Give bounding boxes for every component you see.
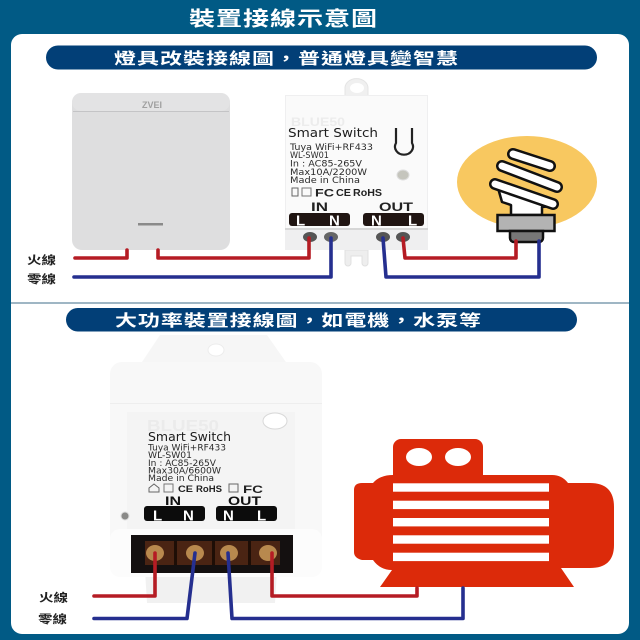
- icon: large smart switch module: Made in China: [148, 474, 214, 484]
- icon: small smart switch module: BLUE50: [291, 115, 345, 129]
- wires: motor circuit: [94, 553, 463, 618]
- icon: small smart switch module: Max10A/2200W: [290, 168, 368, 178]
- heading: lamp wiring banner: [46, 46, 597, 70]
- label: live wire, motor circuit: 火線: [39, 588, 68, 605]
- title: 裝置接線示意圖: [189, 2, 377, 31]
- icon: large smart switch module: FC: [243, 484, 263, 496]
- icon: large smart switch module: L: [257, 508, 266, 524]
- heading: lamp wiring banner: 燈具改裝接線圖，普通燈具變智慧: [114, 46, 458, 69]
- icon: small smart switch module: RoHS: [353, 188, 382, 199]
- icon: small smart switch module: L: [408, 212, 417, 230]
- icon: large smart switch module: In : AC85-265V: [148, 459, 216, 469]
- wires: lamp circuit: [74, 238, 539, 277]
- icon: small smart switch module: In : AC85-265V: [290, 160, 362, 170]
- icon: light bulb: [457, 136, 597, 242]
- icon: small smart switch module: Tuya WiFi+RF433: [289, 143, 373, 153]
- icon: electric motor: [354, 439, 614, 587]
- icon: large smart switch module: RoHS: [196, 484, 222, 495]
- icon: small smart switch module: OUT: [379, 200, 414, 214]
- icon: small smart switch module: FC: [315, 188, 334, 200]
- icon: small smart switch module: CE: [336, 188, 351, 199]
- label: neutral wire, lamp circuit: 零線: [27, 270, 56, 286]
- icon: large smart switch module: OUT: [228, 496, 261, 508]
- icon: small smart switch module: N: [371, 212, 382, 230]
- heading: high power wiring banner: [66, 308, 577, 332]
- icon: small smart switch module: IN: [311, 200, 328, 214]
- icon: small smart switch module: Made in China: [290, 176, 360, 186]
- icon: large smart switch module: Smart Switch: [148, 430, 231, 444]
- icon: small smart switch module: L: [296, 212, 305, 230]
- icon: small smart switch module: [285, 79, 428, 266]
- icon: large smart switch module: L: [153, 508, 162, 524]
- label: live wire, lamp circuit: 火線: [27, 251, 56, 267]
- heading: high power wiring banner: 大功率裝置接線圖，如電機，水泵等: [115, 308, 481, 331]
- icon: wall switch: [72, 93, 230, 250]
- icon: large smart switch module: BLUE50: [147, 418, 219, 435]
- icon: large smart switch module: Tuya WiFi+RF433: [147, 444, 226, 454]
- icon: large smart switch module: IN: [165, 496, 181, 508]
- icon: wall switch: ZVEI: [142, 100, 162, 110]
- icon: small smart switch module: WL-SW01: [290, 151, 329, 161]
- icon: large smart switch module: [110, 335, 322, 603]
- icon: large smart switch module: Max30A/6600W: [148, 466, 222, 476]
- label: neutral wire, motor circuit: 零線: [38, 610, 67, 626]
- icon: large smart switch module: N: [223, 508, 234, 524]
- icon: large smart switch module: WL-SW01: [148, 451, 192, 461]
- icon: large smart switch module: CE: [178, 484, 193, 495]
- icon: large smart switch module: N: [183, 508, 194, 524]
- icon: small smart switch module: Smart Switch: [288, 126, 378, 140]
- icon: small smart switch module: N: [329, 212, 340, 230]
